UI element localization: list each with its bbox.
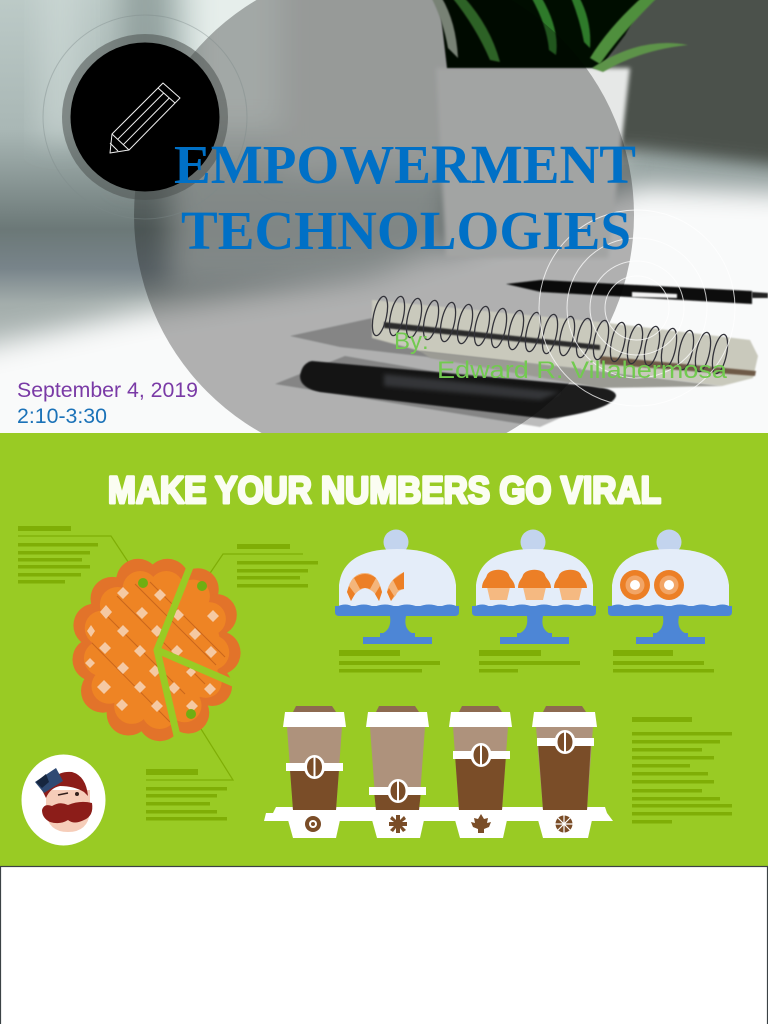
panel: title slide	[0, 0, 768, 433]
icon: pencil badge	[43, 15, 247, 219]
date and time: 2:10-3:30	[17, 405, 107, 428]
pot	[436, 68, 630, 258]
date and time	[18, 382, 197, 423]
spiral notebook	[369, 295, 758, 388]
plant	[430, 0, 688, 72]
coffee tray	[264, 807, 613, 838]
desk shadows	[275, 356, 600, 427]
text placeholder: pie upper left	[18, 526, 142, 584]
cake stand: donuts	[608, 530, 732, 644]
coffee cup 1	[283, 706, 346, 810]
date and time: September 4, 2019	[17, 379, 198, 402]
author: Edward R. Villahermosa	[437, 357, 728, 384]
author	[396, 332, 727, 378]
title: TECHNOLOGIES	[181, 200, 631, 261]
pie slice gaps	[157, 562, 240, 740]
heading: MAKE YOUR NUMBERS GO VIRAL	[108, 470, 661, 512]
text placeholder: coffee column	[632, 717, 732, 824]
panel: infographic	[0, 433, 768, 866]
text placeholder: pie lower	[146, 713, 233, 820]
background desk photo	[0, 0, 768, 428]
coffee cup 2	[366, 706, 429, 810]
title	[174, 146, 636, 250]
title: EMPOWERMENT	[174, 134, 636, 195]
cake stand: muffins	[472, 530, 596, 644]
icon: season symbols	[305, 814, 573, 833]
phone	[300, 361, 616, 419]
dark wall at right	[600, 0, 768, 172]
coffee cup 4	[532, 706, 597, 810]
panel: blank slide	[0, 866, 768, 1024]
icon: bearded man avatar	[22, 754, 106, 846]
desk surface	[0, 166, 768, 433]
cake stand: croissants	[335, 530, 459, 644]
coffee cup 3	[449, 706, 512, 810]
pen	[506, 280, 768, 304]
pie chart	[72, 559, 241, 741]
text placeholder: pie upper right	[202, 544, 318, 588]
author: By:	[394, 328, 429, 355]
concentric rings	[539, 210, 735, 406]
text placeholder: cake captions	[339, 650, 714, 672]
large translucent circle	[134, 0, 634, 465]
